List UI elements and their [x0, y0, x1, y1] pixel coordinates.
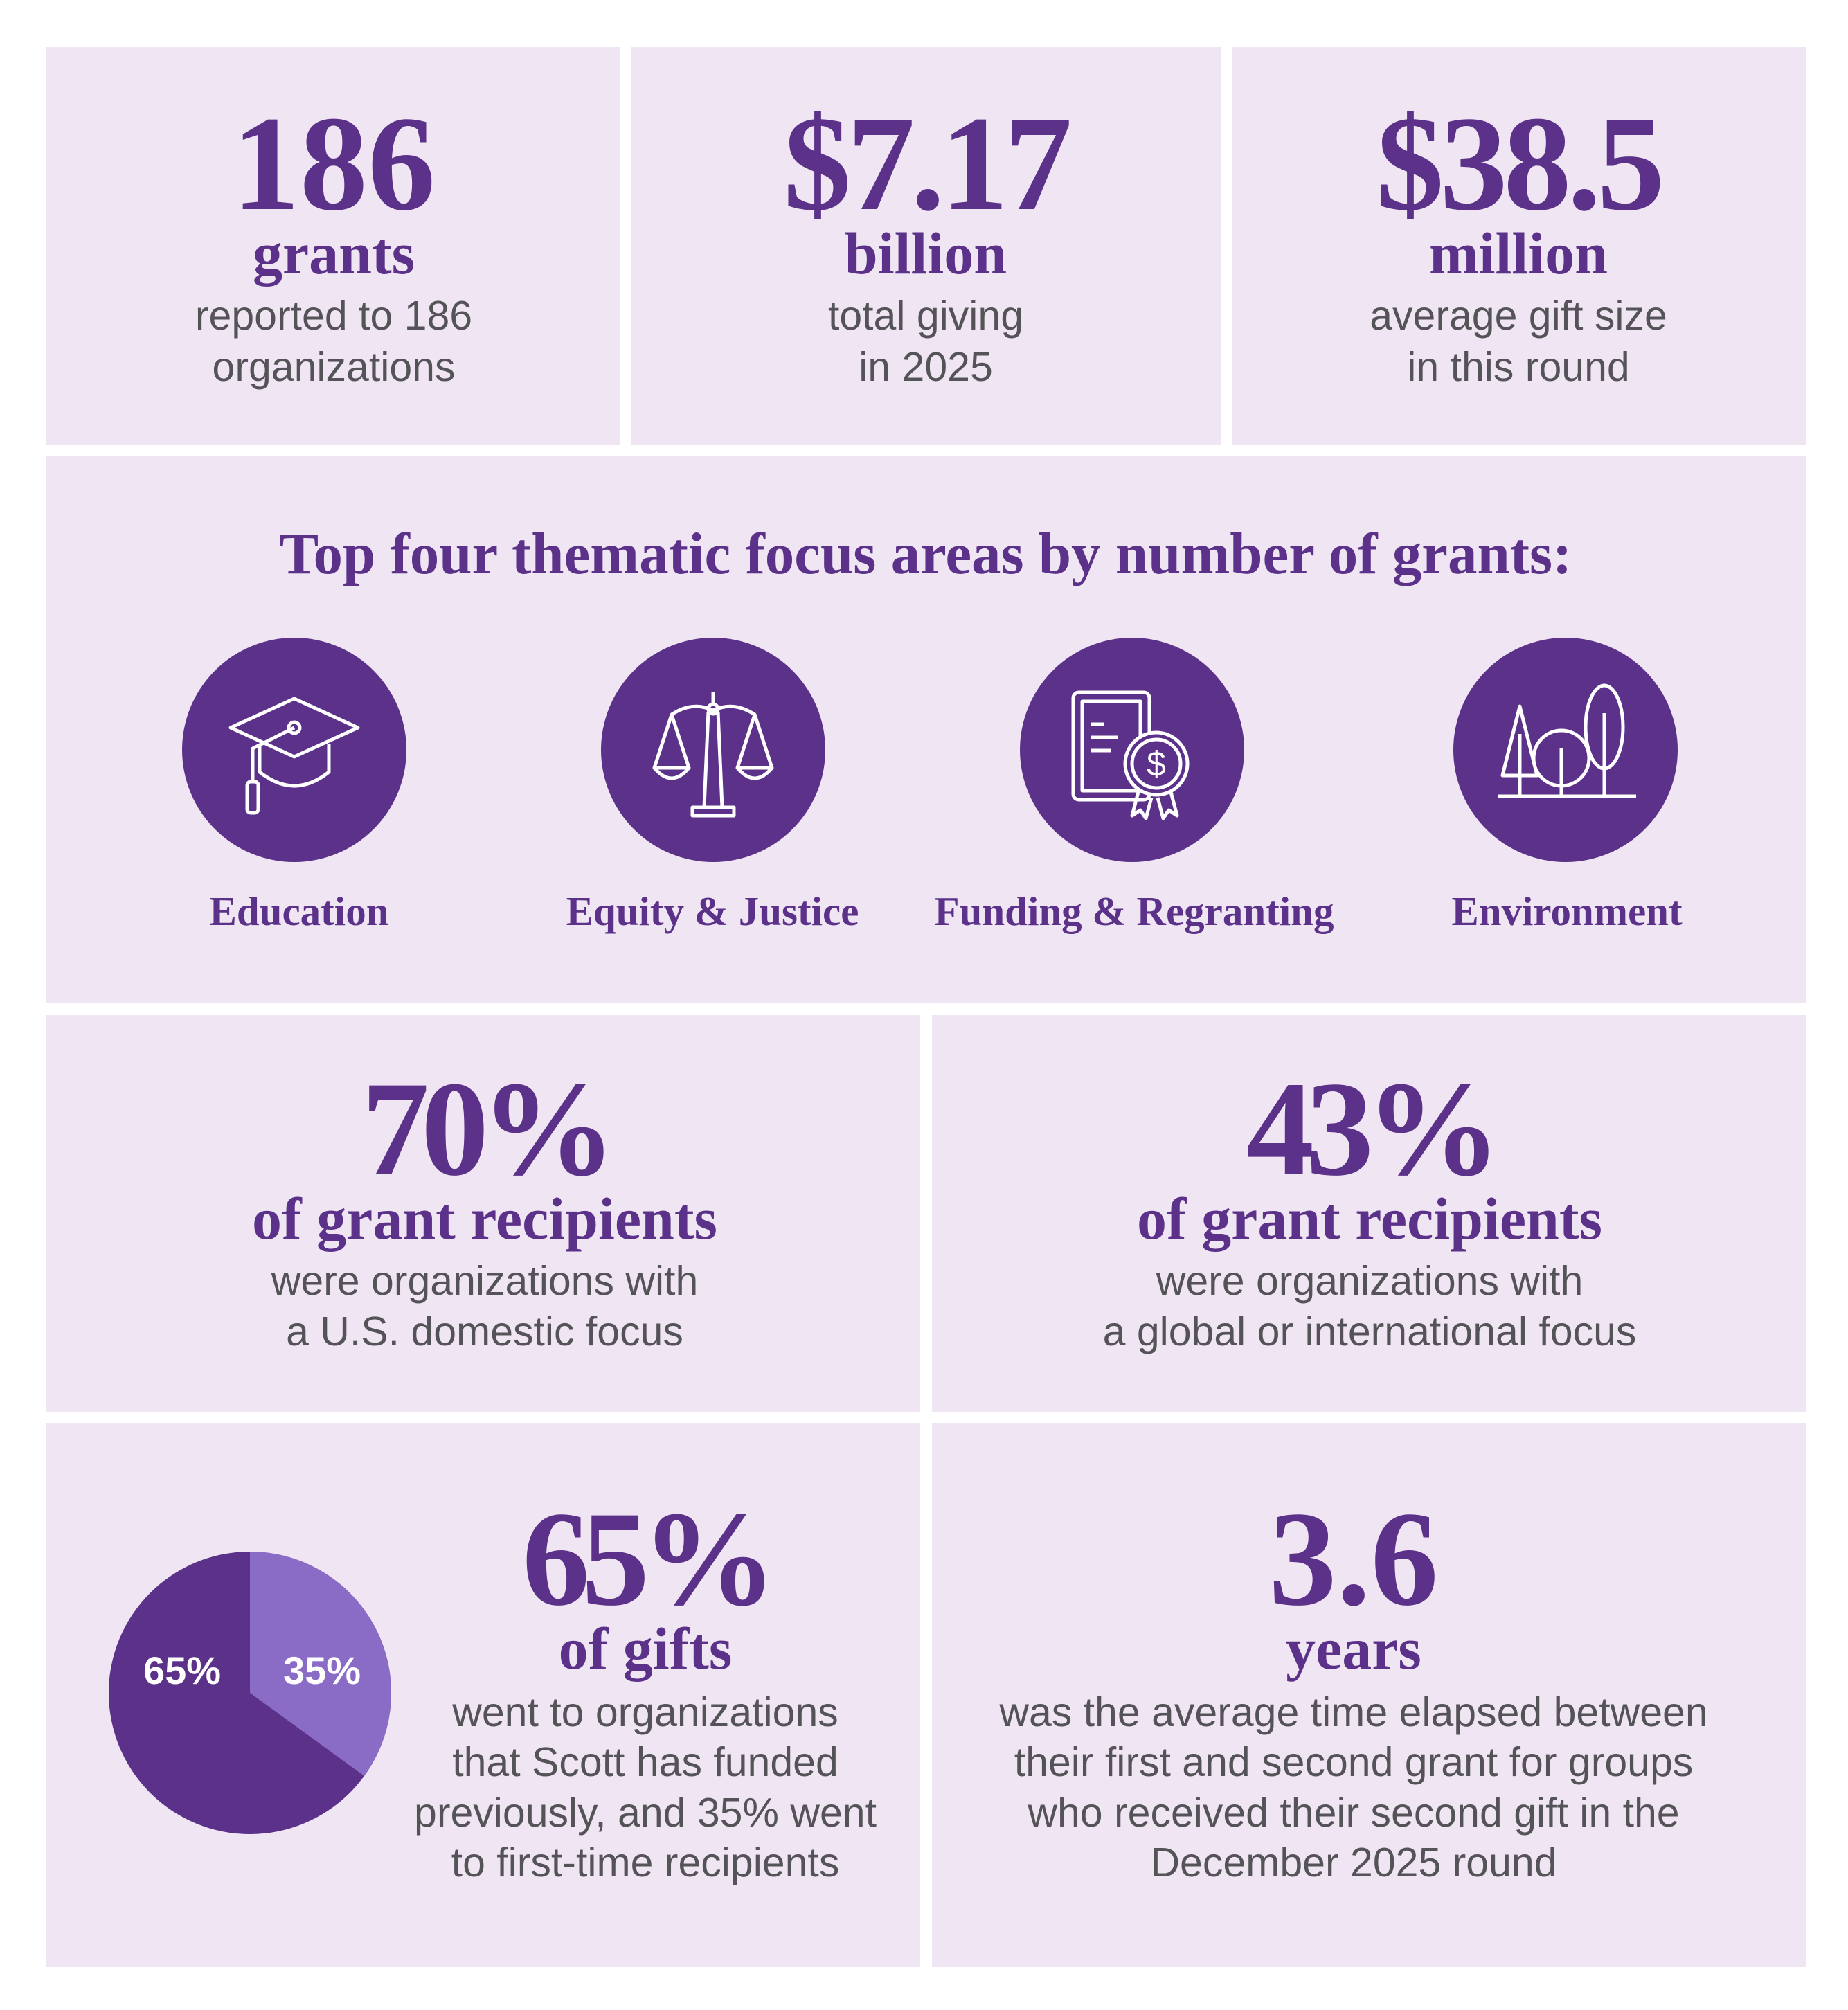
- stat: $7.17: $7.17: [784, 89, 1069, 239]
- icon: scales of justice: [601, 638, 825, 862]
- text: gifts description: went to organizations: [451, 1689, 838, 1735]
- pie chart: 65% / 35%: 35%: [283, 1649, 361, 1692]
- text: global description: a global or international focus: [1103, 1309, 1636, 1354]
- panel: focus areas: [46, 456, 1806, 1003]
- text: gifts description: to first-time recipients: [451, 1840, 839, 1885]
- text: years description: was the average time elapsed between: [998, 1689, 1708, 1735]
- panel: global focus: [932, 1015, 1806, 1412]
- panel: average gift: [1232, 47, 1806, 445]
- text: average gift description: in this round: [1407, 344, 1630, 390]
- text: gifts description: previously, and 35% went: [414, 1790, 877, 1836]
- label: Equity & Justice: Equity & Justice: [566, 888, 859, 934]
- label: of grant recipients: of grant recipients: [252, 1185, 717, 1252]
- label: million: million: [1429, 220, 1608, 287]
- label: of gifts: of gifts: [559, 1615, 732, 1682]
- text: domestic description: a U.S. domestic focus: [286, 1309, 683, 1354]
- stat: 43%: 43%: [1246, 1054, 1493, 1204]
- text: gifts description: that Scott has funded: [452, 1739, 838, 1785]
- text: years description: December 2025 round: [1150, 1840, 1557, 1885]
- panel: domestic focus: [46, 1015, 920, 1412]
- icon: certificate with dollar seal: $: [1147, 744, 1166, 783]
- text: domestic description: were organizations with: [271, 1258, 698, 1304]
- panel: grants: [46, 47, 620, 445]
- pie chart: 65% / 35%: [109, 1552, 391, 1834]
- panel: average time: [932, 1423, 1806, 1967]
- label: Environment: Environment: [1451, 888, 1683, 934]
- stat: $38.5: $38.5: [1376, 89, 1660, 239]
- label: years: years: [1286, 1615, 1421, 1682]
- text: global description: were organizations with: [1156, 1258, 1583, 1304]
- stat: 65%: 65%: [522, 1484, 769, 1634]
- text: years description: their first and second grant for groups: [1014, 1739, 1693, 1785]
- icon: certificate with dollar seal: [1020, 638, 1244, 862]
- label: of grant recipients: of grant recipients: [1137, 1185, 1602, 1252]
- stat: 70%: 70%: [361, 1054, 608, 1204]
- icon: trees: [1453, 638, 1678, 862]
- text: grants description: reported to 186: [195, 293, 472, 339]
- text: total giving description: total giving: [828, 293, 1023, 339]
- stat: 3.6: 3.6: [1268, 1484, 1439, 1634]
- pie chart: 65% / 35%: 65%: [143, 1649, 221, 1692]
- stat: 186: 186: [232, 89, 436, 239]
- text: total giving description: in 2025: [859, 344, 993, 390]
- icon: graduation cap: [182, 638, 406, 862]
- panel: total giving: [631, 47, 1221, 445]
- label: billion: billion: [845, 220, 1007, 287]
- text: years description: who received their second gift in the: [1027, 1790, 1680, 1836]
- text: average gift description: average gift size: [1370, 293, 1667, 339]
- label: Funding & Regranting: Funding & Regranting: [935, 888, 1334, 934]
- panel: repeat gifts: [46, 1423, 920, 1967]
- text: grants description: organizations: [213, 344, 455, 390]
- label: grants: grants: [253, 220, 415, 287]
- label: Education: Education: [209, 888, 389, 934]
- heading: focus areas: Top four thematic focus areas by number of grants:: [280, 521, 1572, 586]
